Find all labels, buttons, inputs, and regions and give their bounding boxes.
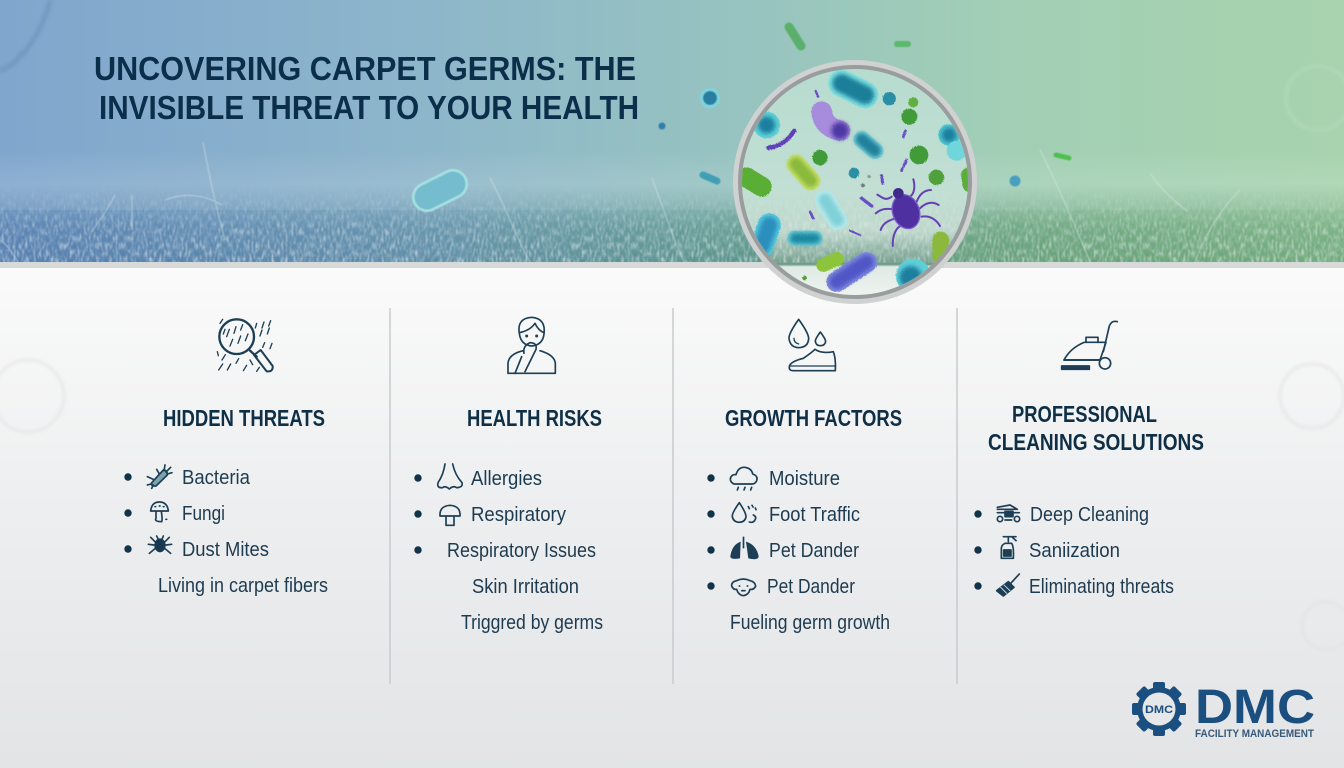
title — [94, 50, 639, 126]
logo: DMC Facility Management: FACILITY MANAGEMENT — [1195, 728, 1314, 740]
list: health risks: Respiratory Issues — [447, 539, 596, 562]
list: growth factors — [707, 467, 890, 634]
title: UNCOVERING CARPET GERMS: THE — [94, 50, 636, 87]
heading: professional cleaning solutions — [988, 401, 1204, 455]
list: growth factors: Fueling germ growth — [730, 611, 890, 634]
list: growth factors: Pet Dander — [769, 539, 859, 562]
list: hidden threats: Dust Mites — [182, 538, 269, 561]
list: growth factors: Pet Dander — [767, 575, 855, 598]
icon: droplet and foot marks — [732, 503, 756, 522]
heading: hidden threats: HIDDEN THREATS — [163, 405, 325, 431]
panel: hidden threats — [124, 319, 328, 597]
icon: carpet cleaning machine — [1062, 321, 1117, 369]
icon: dog face — [732, 579, 756, 596]
icon: scrub brush — [997, 574, 1019, 596]
floating germs outside the lens — [427, 27, 1069, 197]
list: health risks: Triggred by germs — [461, 611, 603, 634]
list: hidden threats: Bacteria — [182, 466, 251, 489]
icon: mushroom — [440, 505, 460, 525]
icon: bacteria — [147, 465, 172, 488]
icon: spray bottle — [1001, 537, 1016, 558]
list: hidden threats: Living in carpet fibers — [158, 574, 328, 597]
band under the banner — [0, 262, 1344, 268]
panel: health risks — [414, 317, 603, 634]
title: INVISIBLE THREAT TO YOUR HEALTH — [99, 89, 639, 126]
list: cleaning solutions — [974, 503, 1174, 598]
list: health risks — [414, 464, 603, 634]
list: health risks: Skin Irritation — [472, 575, 579, 598]
list: hidden threats: Fungi — [182, 502, 225, 525]
logo: DMC Facility Management: DMC — [1195, 681, 1315, 734]
heading: growth factors: GROWTH FACTORS — [725, 405, 902, 431]
list: cleaning solutions: Eliminating threats — [1029, 575, 1174, 598]
heading: health risks: HEALTH RISKS — [467, 405, 602, 431]
icon: magnifier over carpet fibres — [217, 319, 273, 371]
logo: DMC Facility Management — [1132, 681, 1315, 740]
icon: fungi — [151, 502, 168, 522]
icon: water drops and shoe — [789, 319, 835, 371]
list: health risks: Respiratory — [471, 503, 567, 526]
icon: gear — [1132, 682, 1186, 736]
header banner — [0, 0, 1344, 263]
logo: DMC Facility Management: DMC — [1145, 704, 1173, 716]
panel: lower content background — [0, 262, 1344, 768]
list: growth factors: Moisture — [769, 467, 840, 490]
column dividers — [390, 308, 957, 684]
icon: nose — [438, 464, 462, 489]
list: cleaning solutions: Deep Cleaning — [1030, 503, 1149, 526]
icon: cleaning cart — [997, 505, 1020, 522]
icon: person coughing — [508, 317, 555, 373]
icon: rain cloud — [730, 467, 757, 490]
list: growth factors: Foot Traffic — [769, 503, 860, 526]
panel: growth factors — [707, 319, 902, 634]
icon: dust mite small — [148, 536, 172, 553]
heading: professional cleaning solutions: PROFESSIONAL — [1012, 401, 1157, 427]
icon: dust mite — [876, 179, 940, 246]
panel: professional cleaning solutions — [974, 321, 1204, 598]
list: cleaning solutions: Saniization — [1029, 539, 1120, 562]
faint decorative germs in the lower panel — [0, 360, 1344, 650]
heading: professional cleaning solutions: CLEANING SOLUTIONS — [988, 429, 1204, 455]
list: hidden threats — [124, 465, 328, 597]
list: health risks: Allergies — [471, 467, 542, 490]
icon: lungs — [730, 537, 759, 559]
magnifying lens with germs — [733, 60, 977, 304]
